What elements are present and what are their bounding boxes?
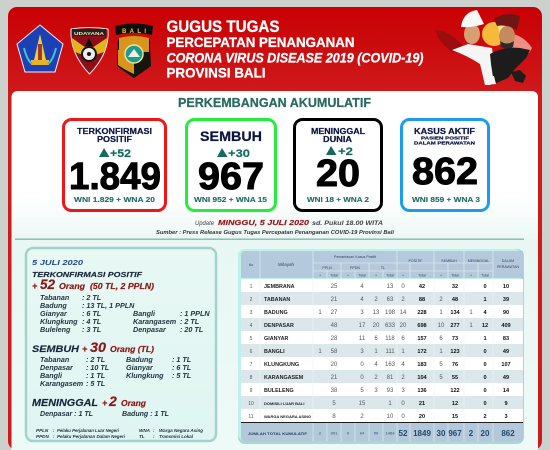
new deaths: Orang <box>121 399 146 408</box>
table header: MENINGGAL <box>468 259 489 263</box>
row 4: 1 <box>469 323 473 329</box>
row 9: BULELENG <box>264 388 294 394</box>
abbreviations legend: Pelaku Perjalanan Luar Negeri <box>57 428 120 433</box>
row 3: 27 <box>331 310 338 316</box>
row 11: 10 <box>387 414 394 420</box>
header title: PROVINSI BALI <box>166 66 266 80</box>
abbreviations legend: Transmisi Lokal <box>159 434 194 439</box>
new recoveries: Gianyar <box>126 363 154 372</box>
row 1: 25 <box>331 284 338 290</box>
row 9: 93 <box>387 388 394 394</box>
row 7: 0 <box>483 362 487 368</box>
abbreviations legend: PPDN <box>36 434 49 439</box>
row 6: 1 <box>318 349 322 355</box>
row 1: JEMBRANA <box>264 284 295 290</box>
row 8: 55 <box>452 375 458 381</box>
panel: sembuh <box>186 120 276 210</box>
new recoveries: Denpasar <box>40 363 74 372</box>
new recoveries: Klungkung <box>126 371 164 380</box>
row 9: 14 <box>503 388 510 394</box>
row 8: 8 <box>250 375 253 381</box>
panel: meninggal dunia <box>294 120 382 210</box>
new positive cases: : 1 PPLN <box>180 309 210 318</box>
panel: terkonfirmasi positif: WNI 1.829 + WNA 20 <box>74 195 155 204</box>
row 11: 0 <box>401 414 405 420</box>
row 1: 42 <box>419 284 425 290</box>
table total row: JUMLAH TOTAL KUMULATIF <box>248 431 308 436</box>
date heading: 5 JULI 2020 <box>32 258 84 267</box>
row 9: 3 <box>401 388 405 394</box>
table header: Total <box>451 274 459 278</box>
row 2: 1 <box>483 297 487 303</box>
row 7: 0 <box>360 362 364 368</box>
update date line: Update <box>195 221 215 227</box>
row 4 <box>250 323 511 329</box>
row 10: 10 <box>248 401 254 407</box>
table total row: 50 <box>374 430 379 436</box>
row 2: 2 <box>439 297 443 303</box>
panel: meninggal dunia: MENINGGAL <box>311 127 365 136</box>
row 7: 7 <box>250 362 253 368</box>
row 6: BANGLI <box>264 349 285 355</box>
new positive cases: 52 <box>40 276 55 292</box>
table total row: 20 <box>481 429 490 438</box>
row 10: 12 <box>452 401 458 407</box>
row 5: 73 <box>452 336 458 342</box>
row 3: 1 <box>439 310 443 316</box>
row 6: 111 <box>385 349 395 355</box>
row 2: 88 <box>419 297 425 303</box>
new positive cases: + <box>32 281 38 291</box>
table total row: 1484 <box>386 430 395 436</box>
abbreviations legend: Pelaku Perjalanan Dalam Negeri <box>57 434 126 439</box>
table header: + <box>440 274 442 278</box>
row 7: 5 <box>439 362 443 368</box>
icon: Polda Bali crest <box>115 24 153 78</box>
table header: Total <box>358 274 366 278</box>
row 5: 157 <box>417 336 427 342</box>
row 10: 1 <box>388 401 392 407</box>
panel: terkonfirmasi positif: 1.849 <box>69 156 161 198</box>
row 11: WARGA NEGARA ASING <box>264 414 311 419</box>
row 1 <box>250 284 509 290</box>
panel: kasus aktif: 862 <box>412 151 478 193</box>
table header <box>241 251 523 279</box>
update date line <box>195 218 384 227</box>
table header: Total <box>386 274 394 278</box>
row 1: 0 <box>483 284 487 290</box>
row 7: 107 <box>501 362 511 368</box>
panel: daily summary <box>26 248 216 441</box>
abbreviations legend: PPLN <box>36 428 49 433</box>
source line: Sumber : Press Release Gugus Tugas Percepatan Penanganan COVID-19 Provinsi Bali <box>156 230 395 236</box>
new positive cases: Denpasar <box>133 325 167 334</box>
row 9: 5 <box>360 388 364 394</box>
panel: kasus aktif: PASIEN POSITIF <box>421 136 469 142</box>
row 3: 228 <box>417 310 427 316</box>
new recoveries: : 5 TL <box>86 379 105 388</box>
row 5 <box>250 336 509 342</box>
row 5: 5 <box>250 336 253 342</box>
new recoveries: : 6 TL <box>172 363 191 372</box>
row 4: 277 <box>450 323 460 329</box>
row 2: 2 <box>401 297 405 303</box>
new recoveries: Karangasem <box>40 379 84 388</box>
table header: TL <box>381 266 385 270</box>
row 3: 134 <box>450 310 461 316</box>
row 2: TABANAN <box>264 297 290 303</box>
row 2: 63 <box>387 297 394 303</box>
row 11: 2 <box>360 414 364 420</box>
new deaths: MENINGGAL <box>32 398 98 409</box>
row 11: 2 <box>483 414 487 420</box>
row 8: KARANGASEM <box>264 375 304 381</box>
new positive cases: : 13 TL, 1 PPLN <box>82 301 135 310</box>
new positive cases: Karangasem <box>133 317 177 326</box>
row 6: 49 <box>503 349 509 355</box>
row 7 <box>250 362 511 368</box>
panel: kasus aktif: WNI 859 + WNA 3 <box>412 195 480 204</box>
row 3: 13 <box>373 310 380 316</box>
header title <box>166 18 424 80</box>
row 7: 4 <box>401 362 405 368</box>
row 4: 20 <box>373 323 380 329</box>
row 6: 1 <box>374 349 378 355</box>
table rows <box>241 279 523 422</box>
row 5: 11 <box>359 336 366 342</box>
row 6: 3 <box>360 349 364 355</box>
header title: GUGUS TUGAS <box>166 18 280 36</box>
row 2: 4 <box>360 297 364 303</box>
row 4: 17 <box>359 323 366 329</box>
panel: kasus aktif: DALAM PERAWATAN <box>414 140 476 146</box>
row 5: 6 <box>401 336 405 342</box>
new deaths: Denpasar : 1 TL <box>40 409 93 418</box>
row 9: 9 <box>250 388 253 394</box>
new positive cases: : 3 TL <box>82 325 101 334</box>
panel: meninggal dunia: WNI 18 + WNA 2 <box>307 195 369 204</box>
row 3: 14 <box>400 310 407 316</box>
row 3: 1 <box>318 310 322 316</box>
panel: meninggal dunia: DUNIA <box>323 135 352 144</box>
table total row: 0 <box>347 430 350 436</box>
header title: CORONA VIRUS DISEASE 2019 (COVID-19) <box>166 50 424 66</box>
new recoveries: : 5 TL <box>172 371 191 380</box>
panel: regional data table <box>238 249 524 444</box>
row 9: 122 <box>450 388 460 394</box>
new deaths: + <box>102 398 108 408</box>
new positive cases: : 2 TL <box>82 293 101 302</box>
panel: meninggal dunia: +2 <box>338 146 353 158</box>
row 4: 409 <box>501 323 511 329</box>
row 4: 4 <box>250 323 253 329</box>
panel: sembuh: WNI 952 + WNA 15 <box>194 195 268 204</box>
row 8 <box>250 375 509 381</box>
table total row: 2 <box>469 429 474 438</box>
row 8: 0 <box>483 375 487 381</box>
row 8: 81 <box>387 375 394 381</box>
new recoveries: Bangli <box>40 371 63 380</box>
row 10 <box>248 401 508 407</box>
row 6: 6 <box>250 349 253 355</box>
update date line: sd. Pukul 18.00 WITA <box>312 220 384 227</box>
new recoveries: SEMBUH <box>32 344 80 355</box>
table header: + <box>375 274 377 278</box>
row 4: 20 <box>400 323 407 329</box>
row 2: 48 <box>452 297 458 303</box>
row 10: 15 <box>359 401 366 407</box>
row 7: 76 <box>452 362 458 368</box>
table header: SEMBUH <box>441 259 457 263</box>
new positive cases: TERKONFIRMASI POSITIF <box>32 270 142 279</box>
row 2: 2 <box>250 297 253 303</box>
row 10: 0 <box>483 401 487 407</box>
abbreviations legend: : <box>53 428 55 433</box>
row 5: 28 <box>331 336 338 342</box>
row 11: 8 <box>332 414 336 420</box>
row 6: 1 <box>439 349 443 355</box>
abbreviations legend: : <box>153 434 155 439</box>
table total row: 967 <box>448 429 462 438</box>
row 11: 15 <box>452 414 458 420</box>
panel: kasus aktif: KASUS AKTIF <box>414 127 475 136</box>
table header: + <box>470 274 472 278</box>
row 3 <box>250 310 509 316</box>
row 10: 9 <box>504 401 508 407</box>
new positive cases: Tabanan <box>40 293 70 302</box>
icon: Kodam Udayana crest: UDAYANA <box>74 31 105 36</box>
new positive cases: : 4 TL <box>82 317 101 326</box>
row 7: 183 <box>417 362 427 368</box>
abbreviations legend: Warga Negara Asing <box>159 428 203 433</box>
icon: governor portraits over Bali map <box>435 10 532 85</box>
new positive cases: Buleleng <box>40 325 71 334</box>
table header: Pemantauan Kasus Positif <box>334 255 376 259</box>
table header: Total <box>330 274 338 278</box>
row 6: 58 <box>331 349 338 355</box>
row 3: 1 <box>469 310 473 316</box>
panel: terkonfirmasi positif <box>64 120 166 210</box>
new positive cases: : 2 TL <box>180 317 199 326</box>
row 1: 10 <box>503 284 509 290</box>
table header: + <box>402 274 404 278</box>
panel: terkonfirmasi positif: POSITIF <box>97 135 132 144</box>
new recoveries: 30 <box>90 339 106 355</box>
row 7: 20 <box>331 362 338 368</box>
new positive cases: Klungkung <box>40 317 78 326</box>
row 8: 5 <box>439 375 443 381</box>
new recoveries: Orang (TL) <box>110 345 154 354</box>
row 4: DENPASAR <box>264 323 294 329</box>
update date line: MINGGU, 5 JULI 2020 <box>218 218 310 227</box>
row 7: KLUNGKUNG <box>264 362 299 368</box>
row 9: 0 <box>483 388 487 394</box>
row 4: 633 <box>385 323 396 329</box>
row 1: 32 <box>452 284 458 290</box>
row 7: 163 <box>385 362 396 368</box>
row 7: 4 <box>374 362 378 368</box>
row 10: DOMISILI LUAR BALI <box>264 401 304 406</box>
new positive cases: Gianyar <box>40 309 68 318</box>
new recoveries: : 1 TL <box>172 355 191 364</box>
row 8: 2 <box>374 375 378 381</box>
table header: + <box>319 274 321 278</box>
panel: sembuh: 967 <box>198 156 264 198</box>
table total row: 1849 <box>413 429 431 438</box>
white report panel <box>12 91 538 450</box>
new positive cases: Orang <box>59 282 85 291</box>
table header: + <box>347 274 349 278</box>
table header: PERAWATAN <box>497 265 519 269</box>
row 11: 11 <box>248 414 254 420</box>
new recoveries <box>32 339 191 388</box>
row 3: 198 <box>385 310 396 316</box>
new deaths <box>32 393 169 418</box>
new positive cases: (50 TL, 2 PPLN) <box>90 282 154 291</box>
row 9: 136 <box>417 388 427 394</box>
row 10: 0 <box>401 401 405 407</box>
row 1: 1 <box>250 284 253 290</box>
panel: terkonfirmasi positif: TERKONFIRMASI <box>77 127 152 136</box>
new positive cases: : 20 TL <box>180 325 203 334</box>
panel: kasus aktif <box>402 120 488 210</box>
row 11 <box>248 414 508 420</box>
new recoveries: + <box>82 344 88 354</box>
new deaths: 2 <box>108 393 117 409</box>
row 8: 49 <box>503 375 509 381</box>
row 3: 3 <box>360 310 364 316</box>
row 5: 1 <box>483 336 487 342</box>
table header: Wilayah <box>278 262 294 267</box>
row 9: 38 <box>331 388 338 394</box>
row 2 <box>250 297 509 303</box>
row 6: 1 <box>401 349 405 355</box>
row 3: 3 <box>250 310 253 316</box>
table header: No <box>249 263 253 267</box>
abbreviations legend: TL <box>139 434 145 439</box>
row 3: 90 <box>503 310 509 316</box>
row 5: 6 <box>374 336 378 342</box>
row 6 <box>250 349 509 355</box>
table total row <box>241 423 523 441</box>
table header: PPDN <box>350 266 360 270</box>
row 10: 5 <box>332 401 336 407</box>
row 5: 6 <box>439 336 443 342</box>
table header: DALAM <box>502 259 514 263</box>
row 4: 12 <box>482 323 488 329</box>
row 1: 4 <box>360 284 364 290</box>
new recoveries: : 2 TL <box>86 355 105 364</box>
table header: POSITIF <box>409 259 423 263</box>
new deaths: Badung : 1 TL <box>122 409 169 418</box>
row 9: 3 <box>374 388 378 394</box>
row 6: 123 <box>450 349 460 355</box>
table total row: 52 <box>399 429 408 438</box>
row 8: 2 <box>401 375 405 381</box>
new recoveries: : 1 TL <box>86 371 105 380</box>
abbreviations legend: : <box>153 428 155 433</box>
row 8: 0 <box>360 375 364 381</box>
panel: sembuh: +30 <box>228 148 250 160</box>
row 1: 0 <box>401 284 405 290</box>
table total row: 64 <box>360 430 365 436</box>
new positive cases: : 6 TL <box>82 309 101 318</box>
panel: terkonfirmasi positif: +52 <box>110 148 131 160</box>
abbreviations legend: : <box>53 434 55 439</box>
new recoveries: : 10 TL <box>86 363 109 372</box>
row 6: 0 <box>483 349 487 355</box>
icon: Bali province crest <box>17 25 63 72</box>
table header: Total <box>418 274 426 278</box>
table total row: 301 <box>331 430 338 436</box>
row 8: 104 <box>417 375 428 381</box>
row 4: 698 <box>417 323 427 329</box>
header title: PERCEPATAN PENANGANAN <box>166 35 354 50</box>
new positive cases <box>32 270 210 334</box>
row 2: 2 <box>374 297 378 303</box>
row 8: 21 <box>331 375 338 381</box>
row 5: 118 <box>385 336 395 342</box>
row 11: 20 <box>419 414 425 420</box>
abbreviations legend: WNA <box>139 428 150 433</box>
row 11: 3 <box>504 414 508 420</box>
new positive cases: Badung <box>40 301 67 310</box>
table header: PPLN <box>322 266 332 270</box>
row 2: 21 <box>331 297 338 303</box>
row 1: 13 <box>387 284 394 290</box>
icon: Kodam Udayana crest <box>71 28 108 74</box>
row 5: 83 <box>503 336 509 342</box>
abbreviations legend <box>36 428 203 439</box>
row 6: 172 <box>417 349 427 355</box>
table total row: 30 <box>437 429 446 438</box>
new positive cases: Bangli <box>133 309 156 318</box>
row 9 <box>250 388 510 394</box>
heading: perkembangan akumulatif: PERKEMBANGAN AKUMULATIF <box>178 95 371 110</box>
row 5: GIANYAR <box>264 336 288 342</box>
row 10: 21 <box>419 401 425 407</box>
panel: meninggal dunia: 20 <box>316 153 360 195</box>
new recoveries: Tabanan <box>40 355 70 364</box>
new recoveries: Badung <box>126 355 153 364</box>
icon: Polda Bali crest: BALI <box>122 29 146 35</box>
panel: sembuh: SEMBUH <box>200 128 262 144</box>
row 4: 48 <box>331 323 338 329</box>
table total row: 2 <box>319 430 322 436</box>
row 4: 10 <box>438 323 445 329</box>
row 2: 39 <box>503 297 509 303</box>
table header: Total <box>481 274 489 278</box>
row 3: 4 <box>483 310 487 316</box>
row 3: BADUNG <box>264 310 288 316</box>
table total row: 862 <box>501 429 515 438</box>
